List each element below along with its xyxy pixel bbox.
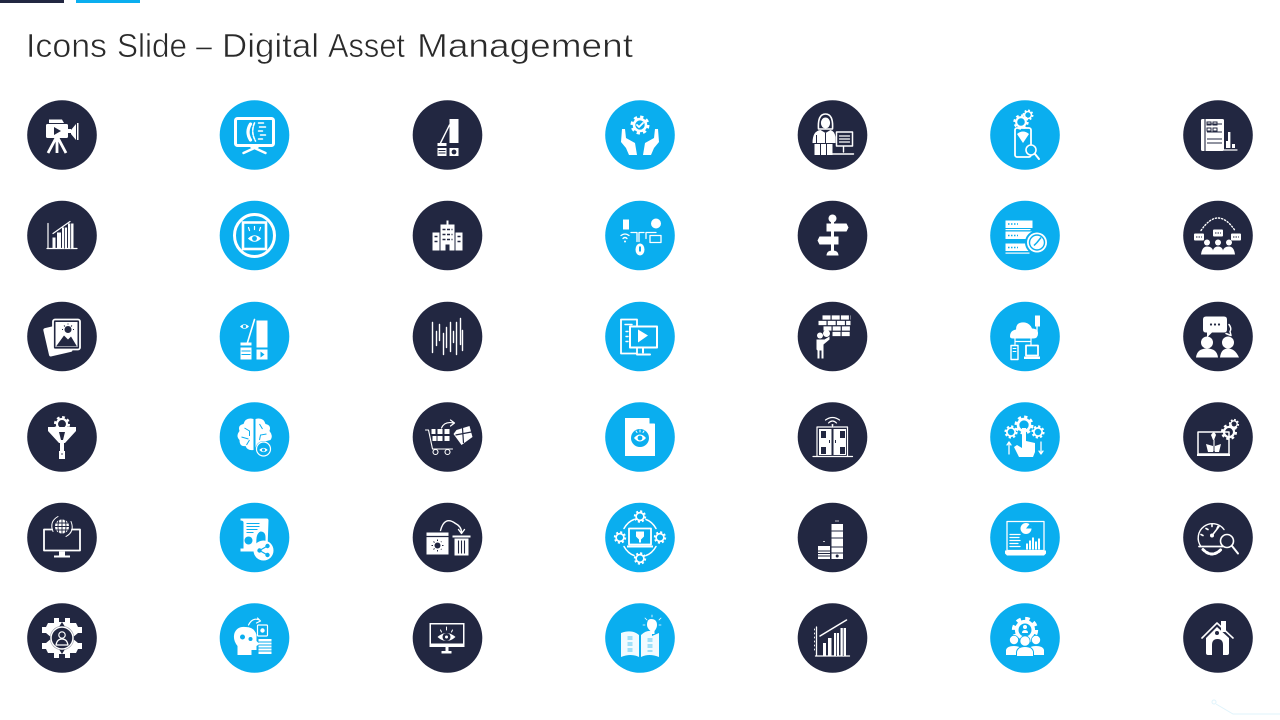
icon: people team with gear <box>990 603 1060 673</box>
top accent bar blue <box>76 0 140 3</box>
icon: gauge gear and magnifier <box>1183 503 1253 572</box>
title: Digital <box>222 27 319 64</box>
icon: shopping cart to gift <box>413 402 482 472</box>
icon: interlocking gears with person <box>27 603 97 673</box>
icon: document with eye <box>605 402 675 472</box>
icon: window to trash <box>413 503 482 572</box>
icon: stacked storage bars <box>798 503 867 572</box>
icon: server stack with clock <box>990 201 1060 270</box>
icon: monitor with rotating globe <box>27 503 97 572</box>
icon: head with gears and document <box>220 603 289 673</box>
title: Management <box>417 27 633 64</box>
icon: funnel with gear and usb <box>27 402 97 472</box>
icon: house <box>1183 603 1253 673</box>
title: Slide <box>117 27 187 64</box>
icon: monitor with brain scan <box>220 100 289 170</box>
icon: open book with light bulb <box>605 603 675 673</box>
top accent bar navy <box>0 0 64 3</box>
icon: brick wall with person <box>798 302 867 371</box>
icon: tall bars with eye and document <box>413 100 482 170</box>
icon: hands holding badge <box>605 100 675 170</box>
icon: document panel and small chart <box>1183 100 1253 170</box>
icon: laptop with analytics <box>990 503 1060 572</box>
icon: monitor with eye <box>413 603 482 673</box>
icon: rising bar chart <box>27 201 97 270</box>
icon: two people chatting <box>1183 302 1253 371</box>
icon: stacked photographs <box>27 302 97 371</box>
icon: direction signpost <box>798 201 867 270</box>
icon: brain with eye <box>220 402 289 472</box>
icon: connected devices network <box>605 201 675 270</box>
icon: office building <box>413 201 482 270</box>
icon: eye and tall bars with document <box>220 302 289 371</box>
icon: scroll document with share <box>220 503 289 572</box>
icon: cloud with computer and laptop <box>990 302 1060 371</box>
icon: group discussion with speech bubbles <box>1183 201 1253 270</box>
icon: video camera on tripod <box>27 100 97 170</box>
icon: smart doors with wifi <box>798 402 867 472</box>
icon: framed eye in ring <box>220 201 289 270</box>
icon: monitor with plant and gears <box>1183 402 1253 472</box>
icon: phone with gears and magnifier <box>990 100 1060 170</box>
icon: growth bar chart with trend line <box>798 603 867 673</box>
icon: audio waveform <box>413 302 482 371</box>
title: Icons <box>26 27 107 64</box>
icon: woman at computer <box>798 100 867 170</box>
icon: hand pressing gears <box>990 402 1060 472</box>
icon: screens with play button <box>605 302 675 371</box>
title: Asset <box>328 27 405 64</box>
title: – <box>196 27 213 64</box>
decorative faint circuit line bottom right <box>1212 700 1280 714</box>
icon: laptop plug in gear cycle <box>605 503 675 572</box>
